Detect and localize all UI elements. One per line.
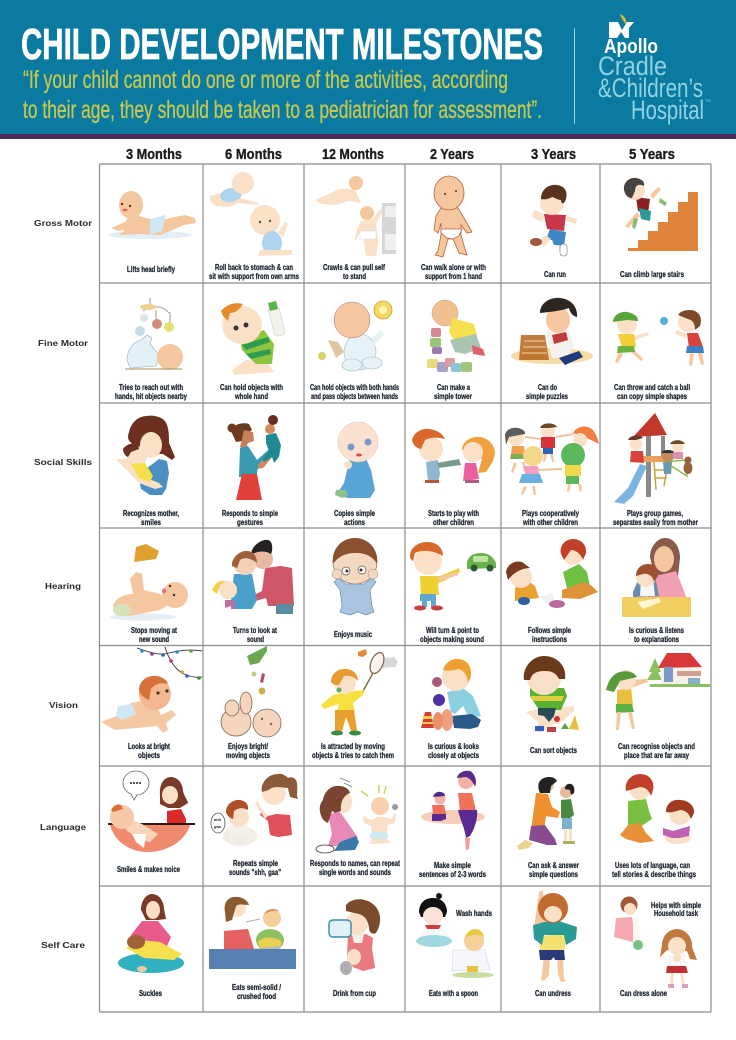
caption: Is curious & listens [629, 626, 684, 635]
caption: Responds to names, can repeat [310, 859, 400, 868]
icon: baby watching string lights [101, 647, 202, 733]
icon: children playing with toy train [412, 429, 495, 483]
cell: self care 3 months [118, 894, 184, 998]
icon: babies rolling and sitting [210, 172, 292, 256]
caption: Drink from cup [333, 989, 376, 998]
caption: Crawls & can pull self [323, 263, 385, 272]
label: helps with household task: Helps with simple [651, 901, 701, 910]
icon: mother talking with baby [108, 771, 195, 852]
cell: fine motor 6 months [220, 301, 286, 401]
cell: fine motor 5 years [613, 310, 704, 401]
cell: vision 12 months [312, 649, 398, 760]
caption [419, 861, 486, 879]
icon: boy running [530, 185, 577, 256]
caption: actions [344, 518, 365, 527]
caption: sit with support from own arms [209, 272, 299, 281]
caption: Is curious & looks [428, 742, 479, 751]
icon: mother asking boy questions [517, 777, 575, 850]
icon: mother and baby [116, 416, 175, 495]
caption [229, 859, 281, 877]
cell: social skills 12 months [334, 422, 378, 527]
caption [522, 509, 579, 527]
cell: social skills 5 years [613, 413, 698, 527]
caption: Will turn & point to [426, 626, 479, 635]
caption: gestures [237, 518, 263, 527]
caption: Make simple [434, 861, 471, 870]
icon: mother breastfeeding [118, 894, 184, 973]
label: helps with household task [651, 901, 701, 918]
row labels: Hearing [45, 582, 81, 591]
icon: boy recognising a far-away house [606, 653, 710, 730]
caption [220, 383, 283, 401]
icon: baby lifting head [108, 191, 196, 239]
caption: Is attracted by moving [321, 742, 385, 751]
cell: self care 12 months [329, 899, 380, 998]
caption: simple tower [434, 392, 472, 401]
caption: sound [247, 635, 264, 644]
icon: family with child turning [212, 540, 294, 614]
caption [612, 861, 696, 879]
icon: toddler examining toys [421, 659, 481, 731]
caption: Can undress [535, 989, 571, 998]
icon: boy doing puzzles with abacus [511, 298, 593, 365]
caption: instructions [532, 635, 567, 644]
caption: Looks at bright [128, 742, 170, 751]
caption: Can make a [437, 383, 470, 392]
caption: Tries to reach out with [119, 383, 183, 392]
cell: fine motor 12 months [310, 301, 399, 401]
cell: gross motor 12 months [315, 176, 396, 281]
caption: Can run [544, 270, 566, 279]
row labels [34, 219, 93, 950]
column headers: 6 Months [225, 146, 282, 163]
caption [323, 263, 385, 281]
icon: mother and child talking [421, 771, 485, 850]
caption: Plays cooperatively [522, 509, 579, 518]
icon: boy pointing at car [410, 542, 496, 610]
icon: toddler in diaper walking [434, 176, 472, 257]
icon: baby reaching for mobile [125, 298, 183, 370]
cell: hearing 12 months [332, 538, 378, 639]
caption: Stops moving at [131, 626, 177, 635]
icon: mother explaining at table [622, 538, 691, 617]
column headers: 5 Years [629, 146, 675, 163]
icon: girl calling baby by name [316, 778, 398, 853]
caption: Responds to simple [222, 509, 278, 518]
caption: whole hand [234, 392, 268, 401]
caption [222, 509, 278, 527]
icon: toddler stacking blocks [427, 300, 485, 372]
caption: objects & tries to catch them [312, 751, 394, 760]
cell: social skills 3 months [116, 416, 179, 527]
icon: children on playground slide [614, 413, 692, 504]
caption [310, 859, 400, 877]
caption: Starts to play with [428, 509, 479, 518]
cell: language 3 months [108, 771, 195, 874]
icon: baby repeating sounds with mother: ahh [214, 817, 222, 822]
caption: Can dress alone [620, 989, 667, 998]
caption: Enjoys bright/ [228, 742, 269, 751]
icon: child undressing [533, 890, 577, 982]
row labels: Language [40, 823, 87, 832]
caption: Recognizes mother, [123, 509, 179, 518]
caption: sentences of 2-3 words [419, 870, 486, 879]
cell: gross motor 6 months [209, 172, 299, 281]
caption: Repeats simple [233, 859, 278, 868]
caption: single words and sounds [319, 868, 391, 877]
cell: fine motor 2 years [427, 300, 485, 401]
caption: closely at objects [428, 751, 479, 760]
icon: toddler drinking from cup [329, 899, 380, 975]
logo: Apollo Cradle and Children's Hospital [598, 14, 711, 125]
cell: gross motor 5 years [620, 178, 698, 279]
icon: boy climbing stairs [624, 178, 698, 251]
icon: girl washing hands and baby eating [416, 893, 494, 978]
caption: moving objects [226, 751, 270, 760]
row labels: Social Skills [34, 458, 93, 467]
cell: gross motor 2 years [421, 176, 486, 281]
caption: to explanations [634, 635, 679, 644]
icon: baby crawling and pulling up [315, 176, 396, 256]
cell: gross motor 3 years [530, 185, 577, 279]
caption: support from 1 hand [425, 272, 482, 281]
icon: girls helping and dressing [614, 896, 697, 988]
caption: simple puzzles [526, 392, 568, 401]
row labels: Fine Motor [38, 339, 88, 348]
caption [526, 383, 568, 401]
caption: Can throw and catch a ball [614, 383, 690, 392]
cell: language 5 years [612, 774, 696, 879]
label: wash hands: Wash hands [456, 909, 492, 918]
cell: social skills 3 years [505, 423, 599, 527]
cell: language 12 months [310, 778, 400, 877]
caption: Turns to look at [233, 626, 277, 635]
cell: self care 2 years [416, 893, 494, 998]
header banner [0, 0, 736, 139]
label: helps with household task: Household task [654, 909, 698, 918]
caption [528, 861, 579, 879]
subtitle quote [23, 66, 542, 124]
caption: Can hold objects with [220, 383, 283, 392]
caption: objects making sound [420, 635, 484, 644]
caption: Can sort objects [530, 746, 577, 755]
cell: vision 6 months [221, 646, 281, 760]
caption [613, 509, 698, 527]
cell: language 2 years [419, 771, 486, 879]
caption: Enjoys music [334, 630, 372, 639]
cell: hearing 6 months [212, 540, 294, 644]
cell: vision 3 years [524, 656, 579, 755]
caption: smiles [141, 518, 161, 527]
caption: new sound [139, 635, 169, 644]
cell: vision 2 years [421, 659, 481, 760]
caption: Eats semi-solid / [232, 983, 282, 992]
milestone grid [100, 164, 711, 1012]
caption: hands, hit objects nearby [115, 392, 187, 401]
caption: Copies simple [334, 509, 375, 518]
caption: tell stories & describe things [612, 870, 696, 879]
cell: language 3 years [517, 777, 579, 879]
icon: baby passing rattle between hands [318, 301, 392, 371]
caption [428, 742, 479, 760]
logo: Apollo Cradle and Children's Hospital: Cradle [598, 51, 667, 81]
cell: gross motor 3 months [108, 191, 196, 274]
column headers: 3 Years [531, 146, 576, 163]
icon: boy sorting objects [524, 656, 579, 733]
cell: self care 5 years [614, 896, 701, 998]
caption [312, 742, 394, 760]
logo: Apollo Cradle and Children's Hospital: Hospital [631, 95, 704, 125]
icon: mother feeding baby at table [209, 897, 296, 969]
caption [614, 383, 690, 401]
cell: social skills 2 years [412, 429, 495, 527]
column headers: 2 Years [430, 146, 474, 163]
caption: Lifts head briefly [127, 265, 175, 274]
icon: mother lifting baby [228, 415, 281, 500]
caption: with other children [522, 518, 578, 527]
caption [128, 742, 170, 760]
icon: five children holding hands [505, 423, 599, 495]
cell: hearing 5 years [622, 538, 691, 644]
icon: baby repeating sounds with mother [211, 774, 298, 846]
icon: baby in blue copying actions [335, 422, 378, 498]
caption: Suckles [139, 989, 162, 998]
row labels: Self Care [41, 941, 86, 950]
caption: Can ask & answer [528, 861, 579, 870]
caption: Can climb large stairs [620, 270, 684, 279]
logo: Apollo Cradle and Children's Hospital: &Children’s [598, 73, 703, 103]
caption: sounds "shh, gaa" [229, 868, 281, 877]
caption [434, 383, 472, 401]
cell: language 6 months [211, 774, 298, 877]
cell: fine motor 3 years [511, 298, 593, 401]
caption: crushed food [237, 992, 276, 1001]
cell: self care 3 years [533, 890, 577, 998]
icon: baby looking at hanging toys [221, 646, 281, 737]
icon: child enjoying music [332, 538, 378, 615]
icon: toddler with butterfly net [321, 649, 398, 736]
caption: Can walk alone or with [421, 263, 486, 272]
icon: boys throwing a ball [613, 310, 704, 366]
caption [334, 509, 375, 527]
cell: fine motor 3 months [115, 298, 187, 401]
caption: Follows simple [528, 626, 571, 635]
caption [618, 742, 695, 760]
cell: vision 5 years [606, 653, 710, 760]
caption: and pass objects between hands [311, 392, 398, 401]
column headers [126, 146, 675, 163]
caption [428, 509, 479, 527]
caption [226, 742, 270, 760]
caption: objects [138, 751, 160, 760]
caption: Uses lots of language, can [615, 861, 690, 870]
caption: Roll back to stomach & can [215, 263, 293, 272]
caption [310, 383, 399, 401]
caption: other children [433, 518, 474, 527]
subtitle quote: “If your child cannot do one or more of the activities, according [23, 66, 508, 94]
icon: woman instructing boy [506, 539, 598, 608]
cell: social skills 6 months [222, 415, 281, 527]
caption: Smiles & makes noice [117, 865, 180, 874]
caption [420, 626, 484, 644]
column headers: 3 Months [126, 146, 182, 163]
cell: vision 3 months [101, 647, 202, 760]
icon: baby holding bottle [221, 301, 286, 375]
logo: Apollo Cradle and Children's Hospital: Apollo [604, 36, 658, 58]
caption [629, 626, 684, 644]
caption [232, 983, 282, 1001]
icon: baby hearing a bell [110, 544, 188, 620]
icon: child telling stories to mother [620, 774, 694, 844]
caption [131, 626, 177, 644]
caption [115, 383, 187, 401]
caption: Can hold objects with both hands [310, 383, 399, 392]
caption: Eats with a spoon [429, 989, 478, 998]
row labels: Gross Motor [34, 219, 92, 228]
icon: baby repeating sounds with mother: gaa [214, 824, 222, 829]
cell: hearing 3 months [110, 544, 188, 644]
caption [209, 263, 299, 281]
column headers: 12 Months [322, 146, 384, 163]
caption: to stand [343, 272, 366, 281]
caption: Can recognise objects and [618, 742, 695, 751]
cell: hearing 2 years [410, 542, 496, 644]
caption: place that are far away [624, 751, 689, 760]
caption: Can do [538, 383, 557, 392]
caption: Plays group games, [627, 509, 683, 518]
cell: self care 6 months [209, 897, 296, 1001]
cell: hearing 3 years [506, 539, 598, 644]
caption [123, 509, 179, 527]
caption: can copy simple shapes [617, 392, 687, 401]
caption [233, 626, 277, 644]
caption [421, 263, 486, 281]
caption: simple questions [529, 870, 578, 879]
row labels: Vision [49, 701, 78, 710]
caption [528, 626, 571, 644]
logo: Apollo Cradle and Children's Hospital: TM [705, 98, 711, 103]
caption: separates easily from mother [613, 518, 698, 527]
